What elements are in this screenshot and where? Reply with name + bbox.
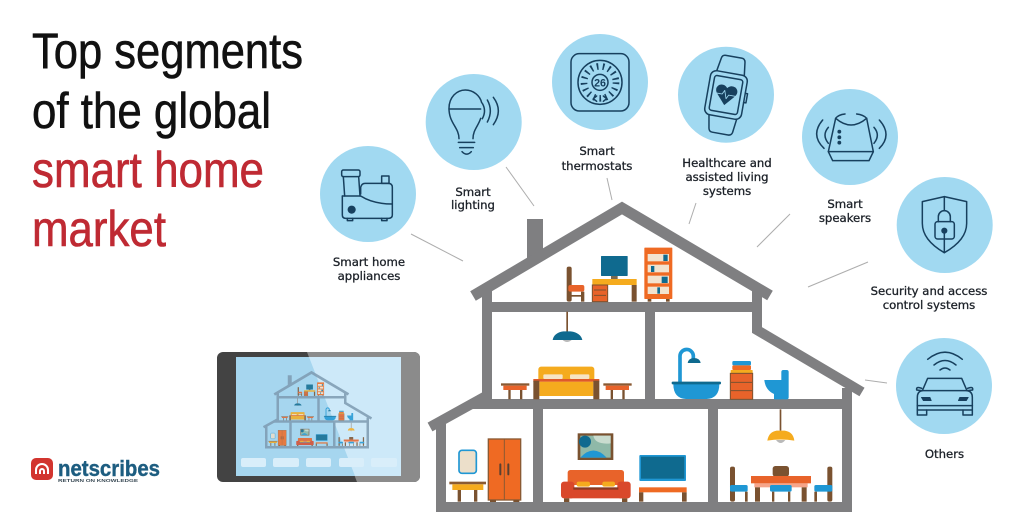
dining table and chairs: [730, 466, 832, 502]
segment: smart lighting: lighting: [451, 198, 495, 212]
logo: netscribes: RETURN ON KNOWLEDGE: [58, 478, 138, 483]
logo: netscribes: [31, 456, 160, 483]
segment: others: Others: [925, 447, 964, 461]
connector lines: [411, 167, 887, 383]
bathroom cabinet and towels: [730, 361, 753, 399]
house illustration: [430, 208, 862, 512]
title: of the global: [32, 83, 271, 139]
segment: smart lighting: Smart: [455, 185, 491, 199]
icon: speaker: [817, 114, 886, 161]
icon: shield with lock: [922, 197, 967, 253]
segment: security and access control systems: Security and access: [871, 284, 987, 298]
title: smart home: [32, 142, 264, 198]
title: Top segments: [32, 23, 303, 79]
segment: smart lighting: [426, 74, 522, 212]
icon: smart watch: [701, 53, 753, 137]
segment: smart thermostats: thermostats: [562, 159, 632, 173]
segment: smart thermostats: Smart: [579, 144, 615, 158]
icon: light bulb: [449, 90, 498, 154]
icon: appliances: [342, 170, 392, 221]
sofa: [561, 470, 631, 502]
attic bookcase: [644, 248, 672, 302]
attic desk and monitor: [592, 256, 637, 302]
furniture: [449, 248, 832, 502]
icon: thermostat: 26: [594, 77, 606, 89]
segment: healthcare and assisted living systems: assisted living: [685, 170, 769, 184]
icon: connected car: [917, 352, 973, 415]
logo: netscribes: netscribes: [58, 456, 160, 481]
segment: security and access control systems: control systems: [883, 298, 975, 312]
TV and stand: [639, 455, 687, 502]
segment: smart home appliances: Smart home: [333, 255, 405, 269]
title: [32, 23, 303, 257]
mirror and console table: [449, 450, 486, 502]
tablet: [217, 352, 420, 482]
wardrobe: [488, 439, 521, 502]
bathtub with shower: [672, 349, 721, 399]
title: market: [32, 201, 166, 257]
toilet: [764, 370, 789, 399]
segment: smart thermostats: [552, 34, 648, 173]
segment: smart speakers: [802, 89, 898, 225]
wall picture: [578, 433, 613, 460]
segment: healthcare and assisted living systems: [678, 47, 774, 198]
segment: healthcare and assisted living systems: systems: [703, 184, 751, 198]
pendant lamp blue: [553, 312, 582, 342]
segment: smart home appliances: appliances: [338, 269, 400, 283]
pendant lamp yellow: [767, 409, 794, 443]
house structure: [430, 208, 862, 512]
segment: security and access control systems: [871, 177, 993, 312]
segment: healthcare and assisted living systems: Healthcare and: [682, 156, 772, 170]
segment: smart speakers: Smart: [827, 197, 863, 211]
bed and bedside tables: [501, 367, 632, 399]
segment: smart speakers: speakers: [819, 211, 871, 225]
segment: others: [896, 338, 992, 461]
segment: smart home appliances: [320, 146, 416, 283]
attic chair: [567, 267, 584, 302]
